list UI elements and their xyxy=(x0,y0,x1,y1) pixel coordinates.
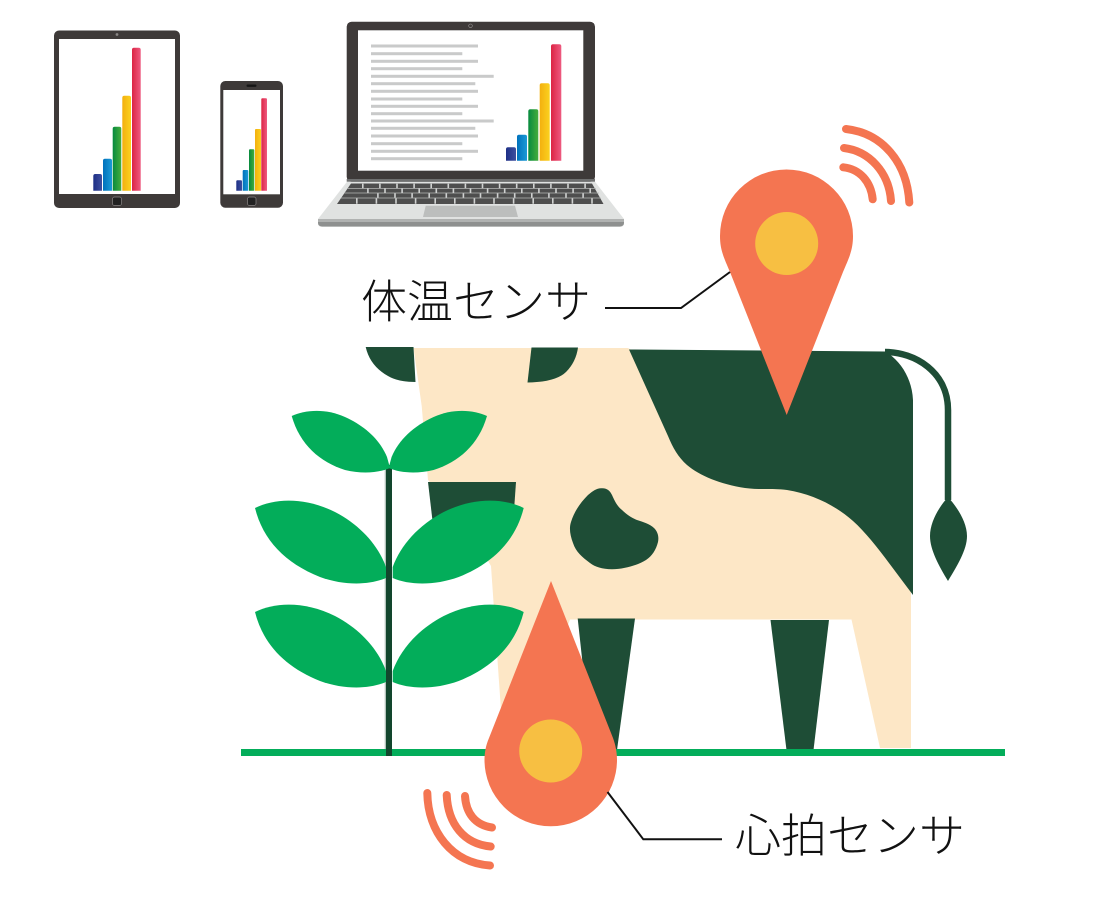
report text lines xyxy=(371,44,494,160)
icon: smartphone with bar chart xyxy=(220,81,283,208)
plant stem base xyxy=(386,745,392,756)
cow ear left xyxy=(366,347,416,382)
cow muzzle xyxy=(428,482,516,525)
cow back patch xyxy=(629,350,913,595)
plant leaves xyxy=(255,411,524,688)
body temperature sensor pin xyxy=(720,170,853,415)
cow tail xyxy=(885,352,967,581)
cow far front leg xyxy=(578,618,635,750)
plant stem xyxy=(385,465,392,756)
illustration: plant xyxy=(255,411,524,756)
bar chart: laptop xyxy=(506,44,561,161)
signal waves: heart sensor xyxy=(427,793,492,866)
icon: tablet with bar chart xyxy=(54,30,180,208)
icon: laptop with report and bar chart xyxy=(318,22,624,227)
cow ear right xyxy=(528,348,578,382)
label: temperature sensor: 体温センサ xyxy=(361,276,591,328)
laptop base xyxy=(318,182,624,227)
bar chart: tablet xyxy=(93,48,141,191)
heart sensor pin xyxy=(484,581,617,826)
ground line xyxy=(241,749,1005,756)
bar chart: smartphone xyxy=(236,98,267,191)
leader line: temperature sensor xyxy=(605,272,730,308)
cow far rear leg xyxy=(770,620,829,750)
leader line: heart sensor xyxy=(608,792,722,839)
label: heart sensor: 心拍センサ xyxy=(735,810,965,862)
cow body spot xyxy=(570,488,658,569)
signal waves: temperature sensor xyxy=(843,129,909,202)
cow body xyxy=(414,348,911,748)
illustration: cow xyxy=(366,347,967,750)
